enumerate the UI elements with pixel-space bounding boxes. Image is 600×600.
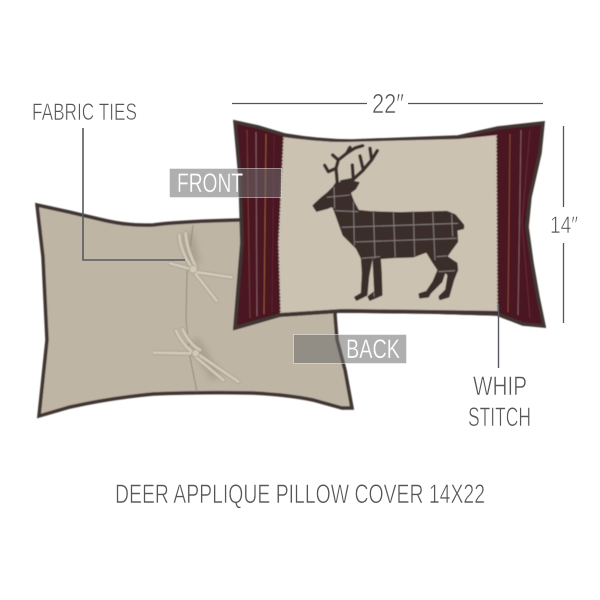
stripes xyxy=(247,130,530,318)
back label text: BACK xyxy=(346,334,400,364)
fabric ties label: FABRIC TIES xyxy=(32,99,137,126)
antlers xyxy=(325,146,377,183)
whip stitch edges xyxy=(278,136,498,312)
back pillow fabric with border xyxy=(37,205,352,416)
width text: 22″ xyxy=(372,88,404,119)
whip stitch callout xyxy=(468,304,531,432)
front label text: FRONT xyxy=(177,168,243,198)
whip stitch text line one: WHIP xyxy=(473,371,527,401)
height line bottom xyxy=(562,243,564,323)
back pillow xyxy=(37,205,352,416)
deer applique xyxy=(313,146,463,300)
deer body xyxy=(313,182,463,300)
height line top xyxy=(562,126,564,207)
tie stitching xyxy=(186,225,197,392)
front pillow xyxy=(235,122,544,328)
upper tie xyxy=(170,233,232,301)
infographic canvas xyxy=(33,94,578,508)
plaid lines xyxy=(327,187,458,297)
width line left xyxy=(232,102,367,104)
front pillow burgundy base and border xyxy=(235,122,544,328)
height text: 14″ xyxy=(550,212,578,239)
fabric ties leader line xyxy=(83,128,185,260)
width line right xyxy=(408,102,543,104)
tie shadows xyxy=(187,233,217,378)
lower tie xyxy=(154,329,238,382)
back label box xyxy=(294,334,406,364)
whip stitch text line two: STITCH xyxy=(468,402,531,432)
front label xyxy=(170,168,282,198)
back label xyxy=(294,334,406,364)
cream center panel xyxy=(278,135,498,313)
whip stitch leader line xyxy=(498,304,500,368)
fabric ties xyxy=(154,233,238,382)
bottom border overlay xyxy=(235,311,523,328)
front label box xyxy=(170,168,282,198)
